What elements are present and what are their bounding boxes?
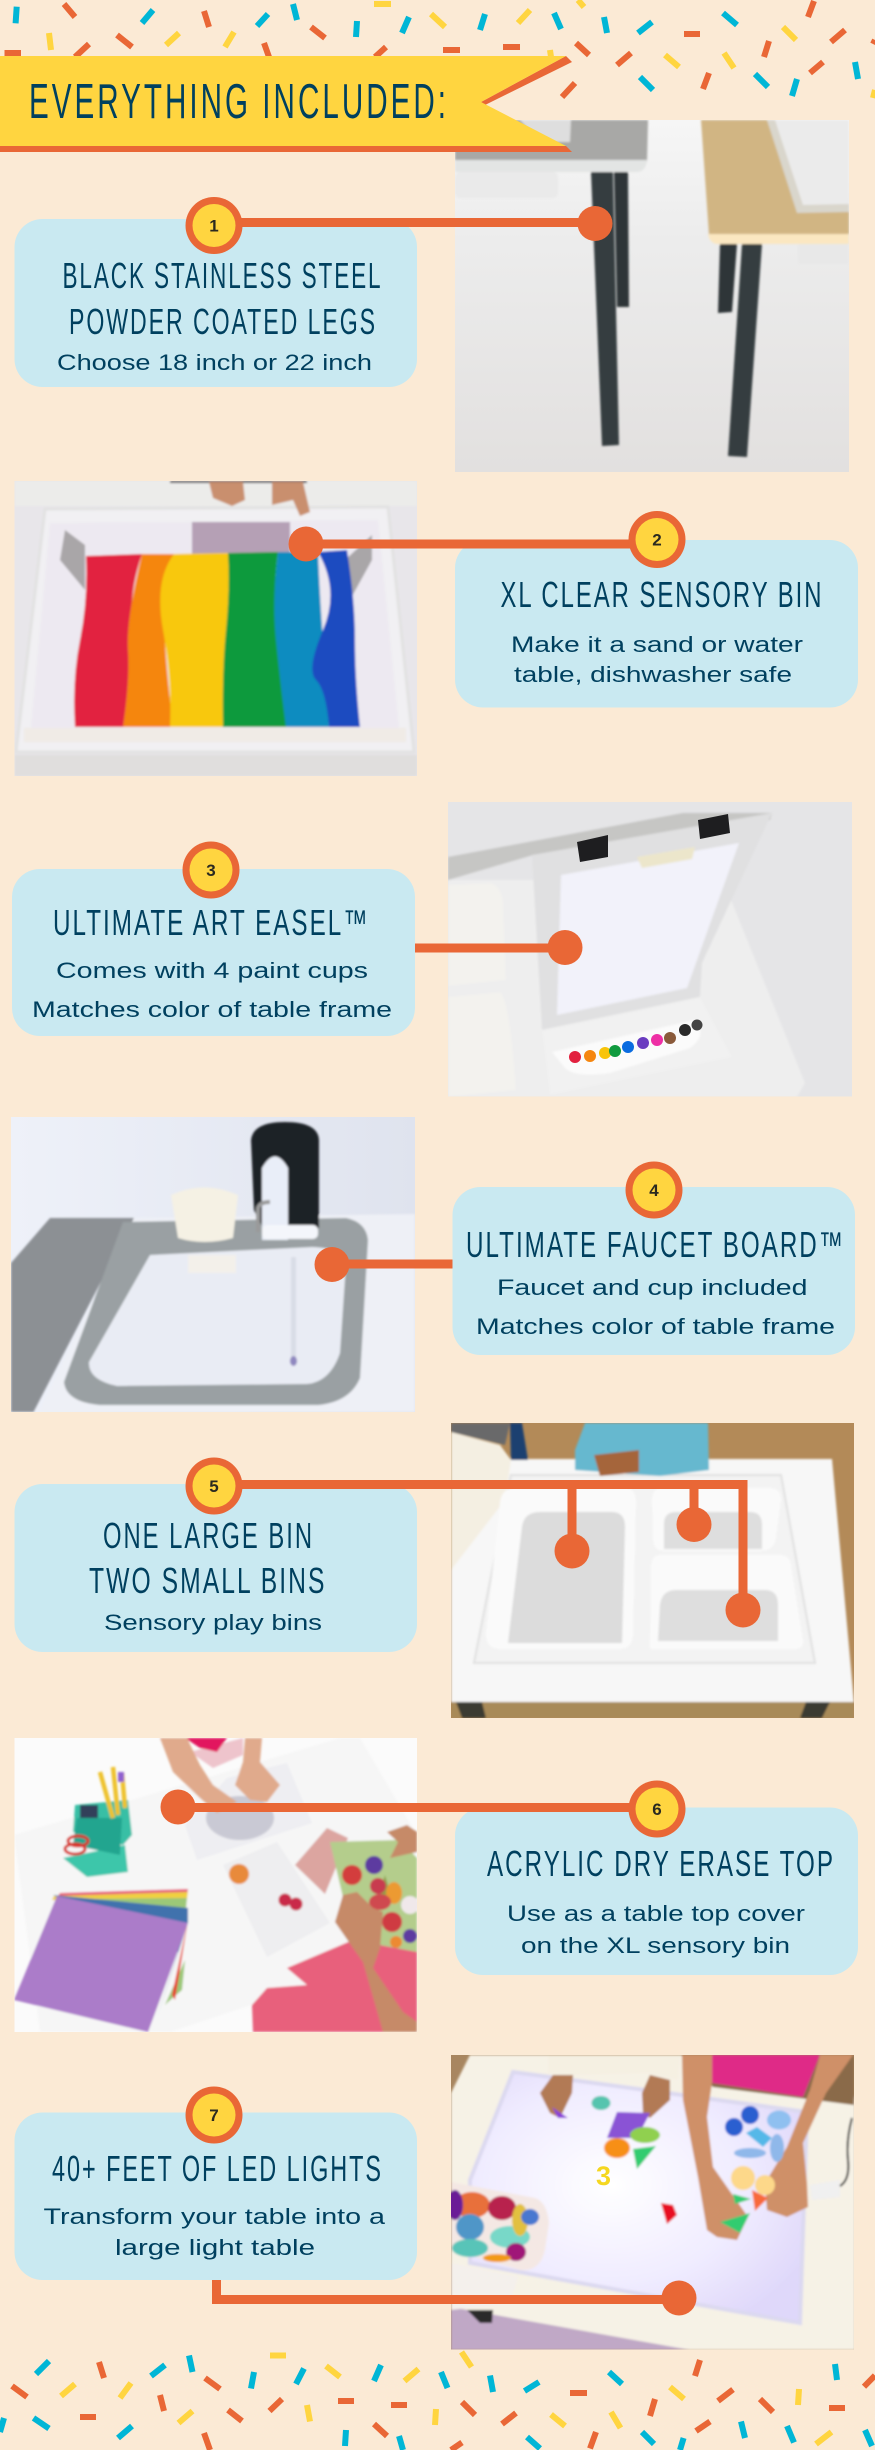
body text: Choose 18 inch or 22 inch	[57, 350, 372, 375]
photo: faucet board	[11, 1117, 415, 1412]
photo: art easel	[448, 802, 852, 1096]
child arms and clothing	[190, 1738, 243, 1768]
connector 5	[240, 1484, 760, 1628]
body line 1: Comes with 4 paint cups	[56, 958, 368, 983]
tray of pieces	[451, 2182, 549, 2270]
connector 2	[288, 526, 635, 562]
section 3: easel	[12, 802, 852, 1097]
panel: bin text	[455, 540, 858, 708]
fruit sheet	[330, 1840, 417, 1957]
number badge 4	[626, 1162, 682, 1218]
panel: bins text	[14, 1484, 417, 1652]
clips	[577, 814, 730, 862]
panel: easel text	[12, 869, 415, 1036]
top confetti	[4, 0, 875, 98]
panel: dry erase text	[455, 1808, 858, 1975]
number badge 3: 3	[206, 861, 216, 880]
coloring sheet	[185, 1763, 312, 1860]
number badge 2: 2	[652, 530, 662, 550]
title: EVERYTHING INCLUDED:	[29, 75, 449, 129]
number badge 7: 7	[209, 2106, 219, 2125]
heading: 40+ FEET OF LED LIGHTS	[52, 2148, 383, 2189]
section 7: LED lights	[14, 2055, 855, 2350]
booklet	[223, 1842, 330, 1957]
connector 6	[160, 1790, 635, 1824]
faucet pump	[251, 1122, 319, 1228]
number badge 3	[182, 842, 240, 898]
section 4: faucet	[11, 1117, 855, 1412]
cup	[171, 1188, 238, 1242]
body line 2: Matches color of table frame	[476, 1314, 835, 1339]
body line 2: table, dishwasher safe	[514, 662, 792, 687]
heading line 2: POWDER COATED LEGS	[69, 301, 377, 342]
number badge 6: 6	[652, 1800, 662, 1819]
panel: legs text	[14, 219, 417, 387]
body line 2: Matches color of table frame	[32, 997, 392, 1022]
paint markers	[569, 1020, 702, 1063]
stickers	[295, 1828, 348, 1894]
connector 7	[216, 2280, 696, 2316]
number badge 5	[186, 1458, 242, 1514]
caddy	[63, 1845, 128, 1877]
body line 1: Faucet and cup included	[497, 1275, 808, 1300]
heading: ONE LARGE BIN	[103, 1515, 314, 1556]
connector 3	[415, 930, 582, 965]
number badge 2	[628, 511, 686, 568]
heading: ULTIMATE ART EASEL™	[53, 902, 370, 943]
hands	[209, 482, 245, 506]
number badge 1	[186, 197, 242, 254]
number badge 4: 4	[649, 1181, 659, 1200]
heading line 2: TWO SMALL BINS	[89, 1560, 326, 1601]
panel: faucet text	[452, 1187, 855, 1355]
children	[548, 2055, 680, 2080]
number badge 7	[186, 2086, 242, 2144]
section 5: bins	[14, 1423, 854, 1718]
child arms	[575, 1423, 709, 1476]
photo: three bins	[451, 1423, 854, 1718]
photo: dry erase top	[14, 1738, 417, 2032]
panel: LED text	[14, 2112, 417, 2280]
number badge 6	[628, 1780, 686, 1838]
body text: Sensory play bins	[104, 1610, 322, 1635]
body line 2: large light table	[115, 2235, 315, 2260]
light pieces	[592, 2096, 610, 2110]
paper stack	[58, 1889, 188, 1896]
connector 4	[314, 1247, 452, 1282]
bottom confetti	[0, 2352, 875, 2450]
body line 1: Transform your table into a	[44, 2204, 386, 2229]
scissors	[65, 1844, 85, 1854]
clear frame	[474, 1475, 815, 1663]
numeral piece: 3	[596, 2161, 611, 2191]
photo: table legs	[455, 120, 849, 472]
photo: light table	[451, 2055, 854, 2350]
number badge 1: 1	[209, 216, 219, 236]
section 2: clear bin	[14, 481, 858, 776]
heading: BLACK STAINLESS STEEL	[62, 255, 382, 296]
photo: rainbow rice bin	[14, 481, 417, 776]
body line 2: on the XL sensory bin	[521, 1933, 790, 1958]
section 6: dry erase	[14, 1738, 858, 2032]
body line 1: Make it a sand or water	[511, 632, 804, 657]
section 1: legs	[14, 120, 849, 472]
connector 1	[240, 206, 612, 241]
controller and cable	[810, 2180, 840, 2200]
body line 1: Use as a table top cover	[507, 1901, 806, 1926]
title banner	[0, 56, 572, 152]
number badge 5: 5	[209, 1477, 219, 1496]
